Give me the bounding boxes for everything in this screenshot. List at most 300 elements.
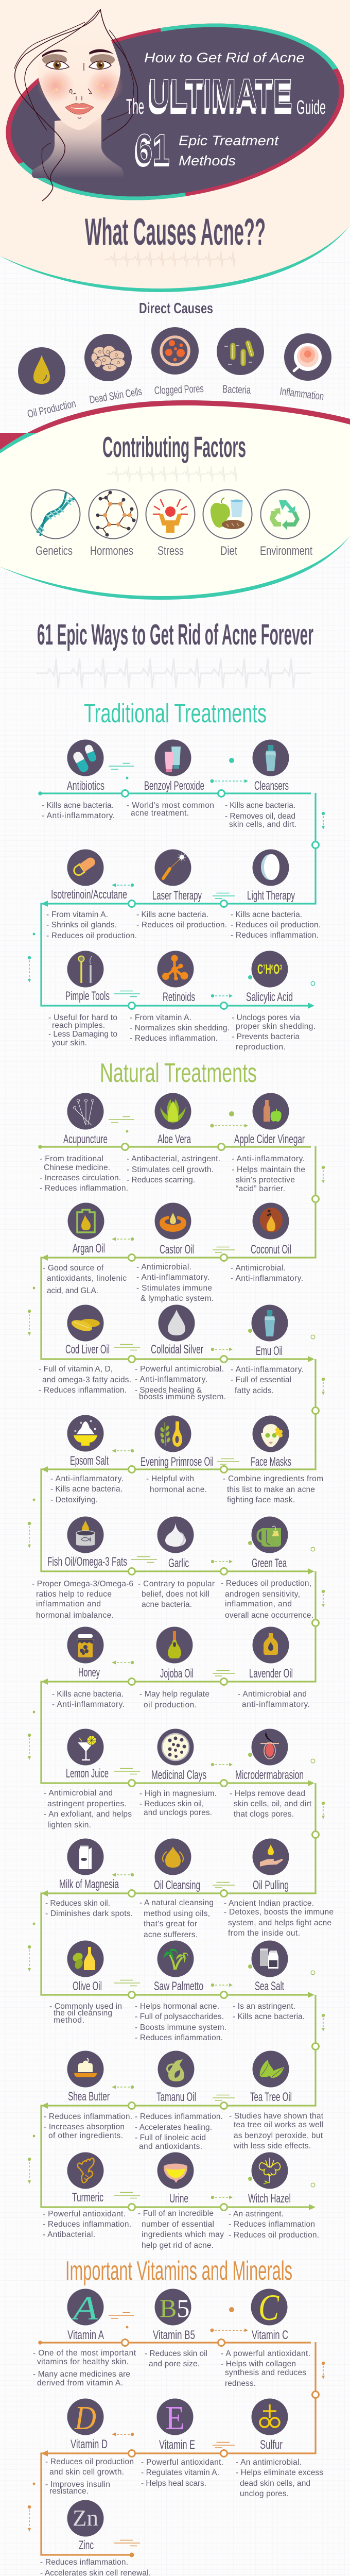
description: - Reduces inflammation. xyxy=(135,2033,223,2042)
item: Cleansers xyxy=(225,740,296,829)
icon: hand and drop xyxy=(252,1838,289,1875)
description: - Reduces oil production. xyxy=(231,921,321,929)
description: boosts immune system. xyxy=(139,1393,226,1401)
description xyxy=(52,1690,125,1709)
description: resistance. xyxy=(49,2487,89,2496)
label: Tea Tree Oil xyxy=(250,2090,292,2104)
description: method using oils, xyxy=(144,1909,210,1918)
description: skin's protective xyxy=(236,1176,295,1184)
item: Cod Liver Oil xyxy=(39,1304,131,1395)
description xyxy=(136,1263,214,1303)
description xyxy=(229,2210,319,2240)
item: Light Therapy xyxy=(231,849,321,940)
description: overall acne occurrence. xyxy=(225,1611,313,1620)
label: Light Therapy xyxy=(247,889,295,903)
label: Dead Skin Cells: Dead Skin Cells xyxy=(89,385,143,406)
description xyxy=(221,2349,310,2388)
description xyxy=(141,2458,223,2488)
label: Honey xyxy=(78,1666,100,1680)
item: Antibiotics xyxy=(42,740,115,820)
icon: hair follicle xyxy=(251,1729,288,1765)
description: - Removes oil, dead xyxy=(225,812,295,821)
item: Argan Oil xyxy=(43,1202,127,1295)
label: Apple Cider Vinegar xyxy=(234,1132,305,1146)
label: Castor Oil xyxy=(160,1243,194,1257)
description: - Boosts immune system. xyxy=(135,2023,226,2032)
icon: salt bowl xyxy=(67,1415,104,1452)
description xyxy=(127,801,214,818)
hero title xyxy=(126,50,326,176)
description xyxy=(136,910,227,929)
description xyxy=(230,1789,312,1819)
description: that's great for xyxy=(144,1920,197,1928)
description: this list to make an acne xyxy=(227,1485,315,1494)
description: of other ingredients. xyxy=(48,2131,123,2140)
item: Zinc xyxy=(40,2500,151,2576)
description: - World's most common xyxy=(127,801,214,810)
description: - Reduces oil production. xyxy=(229,2231,319,2240)
description xyxy=(45,1899,133,1918)
description: - Reduces inflammation. xyxy=(44,2112,132,2121)
description: - Helps remove dead xyxy=(230,1789,305,1798)
description: - From traditional xyxy=(40,1155,103,1163)
label: Sulfur xyxy=(260,2438,283,2452)
description: - Accelerates healing. xyxy=(135,2123,212,2132)
label: Sea Salt xyxy=(255,1979,284,1993)
icon: milk carton xyxy=(67,1838,104,1875)
description: dead skin cells, and xyxy=(240,2479,310,2488)
description: reach pimples. xyxy=(52,1021,105,1030)
decorative heartbeat line xyxy=(105,252,235,266)
word: ULTIMATE: ULTIMATE xyxy=(147,76,292,123)
description xyxy=(43,1264,127,1295)
subtitle line: How to Get Rid of Acne xyxy=(144,50,305,65)
label: Environment: Environment xyxy=(260,544,312,558)
description: - An astringent. xyxy=(229,2210,284,2218)
description xyxy=(139,1690,209,1709)
label: Vitamin B5 xyxy=(153,2328,195,2342)
label: Olive Oil xyxy=(73,1979,102,1993)
description: - Kills acne bacteria. xyxy=(225,801,295,810)
label: Turmeric xyxy=(72,2191,103,2205)
description: - Contrary to popular xyxy=(138,1580,215,1588)
description: - Stimulates cell growth. xyxy=(127,1165,214,1174)
icon: leaves xyxy=(252,2050,289,2088)
description: - From vitamin A. xyxy=(130,1013,191,1022)
icon: hormones xyxy=(89,489,138,539)
item: Evening Primrose Oil xyxy=(141,1416,214,1494)
description: Chinese medicine. xyxy=(44,1163,110,1172)
description: - Reduces inflammation. xyxy=(39,1386,127,1395)
description: hormonal acne. xyxy=(150,1485,207,1494)
description: - Normalizes skin shedding. xyxy=(130,1024,230,1032)
description xyxy=(135,2112,223,2151)
label: Oil Production: Oil Production xyxy=(26,398,77,420)
description: - Reduces scarring. xyxy=(127,1176,195,1184)
icon: oil bowl xyxy=(154,1202,191,1240)
label: Tamanu Oil xyxy=(156,2090,196,2104)
label: Bacteria: Bacteria xyxy=(222,383,251,396)
description: - Proper Omega-3/Omega-6 xyxy=(32,1580,133,1588)
label: Genetics: Genetics xyxy=(36,544,73,558)
item: Epsom Salt xyxy=(50,1415,124,1504)
label: Oil Pulling xyxy=(253,1878,289,1892)
description: - Reduces inflammation. xyxy=(40,2558,128,2567)
icon: capsules xyxy=(67,740,104,776)
description: astringent properties. xyxy=(47,1800,127,1808)
item: Lavender Oil xyxy=(238,1627,310,1709)
icon: clay dish xyxy=(157,1729,194,1765)
description: - Reduces skin oil xyxy=(145,2349,207,2358)
description: reproduction. xyxy=(236,1043,286,1052)
description: skin cells, oil, and dirt xyxy=(234,1800,312,1808)
icon: formula: 3 xyxy=(279,963,282,971)
icon: jojoba bottle xyxy=(156,1627,192,1663)
label: Medicinal Clays xyxy=(151,1768,206,1782)
description: fighting face mask. xyxy=(227,1496,295,1504)
description xyxy=(139,1899,214,1939)
description: system, and helps fight acne xyxy=(228,1919,331,1927)
label: Acupuncture xyxy=(63,1132,108,1146)
description xyxy=(139,1789,217,1817)
label: Benzoyl Peroxide xyxy=(144,779,204,793)
item: Face Masks xyxy=(223,1416,323,1504)
icon: garlic xyxy=(157,1517,194,1553)
description: your skin. xyxy=(52,1039,87,1047)
description: - Anti-inflammatory. xyxy=(50,1475,124,1483)
illustration: woman with acne xyxy=(14,9,138,201)
icon: light xyxy=(252,849,289,886)
description: - Reduces oil production xyxy=(45,2458,134,2466)
icon: letters B5: B5 xyxy=(160,2294,189,2323)
description: - Reduces inflammation. xyxy=(135,2112,223,2121)
description: - Powerful antimicrobial. xyxy=(135,1365,224,1374)
heading: Traditional Treatments: Traditional Treatments xyxy=(84,699,267,728)
description: - Increases circulation. xyxy=(40,1174,121,1182)
description xyxy=(40,1155,128,1193)
label: Lavender Oil xyxy=(249,1667,293,1681)
description xyxy=(43,2210,131,2239)
item: Lemon Juice xyxy=(44,1729,132,1829)
description xyxy=(236,2458,323,2498)
word: Guide: Guide xyxy=(296,97,326,118)
description: - Diminishes dark spots. xyxy=(45,1909,133,1918)
label: Milk of Magnesia xyxy=(59,1877,119,1891)
description: - Kills acne bacteria. xyxy=(233,2012,305,2021)
label: Vitamin D xyxy=(71,2437,108,2451)
description: - Regulates vitamin A. xyxy=(141,2468,219,2477)
description: - Studies have shown that xyxy=(229,2112,324,2121)
description: with less side effects. xyxy=(233,2142,311,2150)
tagline line 1: Epic Treatment xyxy=(179,133,279,148)
description xyxy=(223,1475,323,1504)
label: Oil Cleansing xyxy=(154,1878,200,1892)
description: - Unclogs pores via xyxy=(232,1013,300,1022)
icon: letter D: D xyxy=(74,2399,96,2437)
item: Urine xyxy=(138,2153,224,2250)
description: that clogs pores. xyxy=(234,1810,294,1819)
description: lighten skin. xyxy=(47,1821,91,1829)
description xyxy=(33,2349,136,2387)
description: - Detoxes, boosts the immune xyxy=(224,1908,334,1917)
icon: bacteria xyxy=(217,328,264,375)
description: oil production. xyxy=(144,1701,197,1709)
description xyxy=(130,1013,230,1043)
description xyxy=(50,1475,124,1504)
description: - Powerful antioxidant. xyxy=(43,2210,126,2218)
item: Vitamin D xyxy=(45,2399,134,2496)
label: Clogged Pores: Clogged Pores xyxy=(154,383,204,397)
description: and omega-3 fatty acids. xyxy=(42,1376,131,1384)
item: Benzoyl Peroxide xyxy=(127,740,214,818)
description: & lymphatic system. xyxy=(141,1294,214,1303)
icon: letter C: C xyxy=(258,2287,279,2328)
icon: dead skin cells xyxy=(84,334,132,381)
description: - Is an astringent. xyxy=(233,2002,295,2011)
description: - High in magnesium. xyxy=(139,1789,217,1798)
label: Shea Butter xyxy=(68,2090,110,2104)
icon: silver drop xyxy=(159,1304,195,1342)
description: help get rid of acne. xyxy=(142,2241,214,2250)
icon: oil production xyxy=(18,347,65,395)
label: Garlic xyxy=(168,1556,189,1570)
label: Lemon Juice xyxy=(66,1767,109,1781)
description: - Antimicrobial. xyxy=(231,1264,286,1273)
description: - From vitamin A. xyxy=(46,910,108,919)
icon: formula: O xyxy=(273,961,279,977)
description: - Helps hormonal acne. xyxy=(135,2002,219,2011)
description: and antioxidants. xyxy=(139,2142,202,2151)
description xyxy=(224,1899,334,1938)
description: hormonal imbalance. xyxy=(36,1611,114,1620)
label: Jojoba Oil xyxy=(160,1667,194,1681)
description: acne bacteria. xyxy=(142,1600,192,1609)
word: ULTIMATE xyxy=(147,71,292,123)
icon: letters Zn xyxy=(67,2500,104,2537)
description: - Anti-inflammatory. xyxy=(231,1274,303,1283)
description: derived from vitamin A. xyxy=(37,2379,123,2387)
description: - Reduces inflammation. xyxy=(43,2220,131,2229)
description: - Full of essential xyxy=(231,1376,291,1384)
label: Vitamin C xyxy=(252,2328,288,2342)
description: - Helps heal scars. xyxy=(141,2479,206,2488)
item: Emu Oil xyxy=(231,1304,304,1395)
description: - Anti-inflammatory. xyxy=(135,1375,207,1384)
description: - Anti-inflammatory. xyxy=(42,811,115,820)
item: Vitamin B5 xyxy=(145,2289,207,2368)
description xyxy=(138,2209,224,2250)
icon: letter D xyxy=(67,2399,104,2437)
word: ULTIMATE: ULTIMATE xyxy=(149,71,292,117)
label: Cleansers xyxy=(254,779,289,793)
description: - Kills acne bacteria. xyxy=(136,910,208,919)
label: Inflammation: Inflammation xyxy=(279,385,325,402)
label: Cod Liver Oil xyxy=(65,1343,110,1357)
description: - Full of vitamin A, D, xyxy=(39,1365,113,1374)
label: Colloidal Silver xyxy=(151,1343,203,1357)
description: - Reduces inflammation. xyxy=(40,1184,128,1193)
description: acne sufferers. xyxy=(144,1930,198,1939)
panel: hero cream blob xyxy=(0,0,350,292)
item: Retinoids xyxy=(130,951,230,1043)
description: - A powerful antioxidant. xyxy=(221,2349,310,2358)
icon: letter A: A xyxy=(71,2290,98,2327)
label: Witch Hazel xyxy=(248,2192,291,2206)
label: Vitamin E xyxy=(159,2438,195,2452)
timeline: traditional treatments xyxy=(28,758,325,1009)
label: Fish Oil/Omega-3 Fats xyxy=(47,1555,127,1569)
tagline line 2: Methods xyxy=(179,153,236,168)
description: - Increases absorption xyxy=(44,2123,125,2131)
item: Vitamin A xyxy=(33,2289,136,2387)
description: - Full of an incredible xyxy=(138,2209,214,2218)
description: vitamins for healthy skin. xyxy=(37,2358,129,2366)
icon: letter A xyxy=(67,2289,104,2327)
label: Epsom Salt xyxy=(70,1454,109,1468)
description: - Speeds healing & xyxy=(135,1386,202,1395)
description: - Reduces oil production. xyxy=(136,921,227,929)
item: Witch Hazel xyxy=(229,2153,319,2240)
label: Pimple Tools xyxy=(65,989,110,1003)
icon: molecule xyxy=(157,951,194,987)
label: Zinc xyxy=(79,2538,94,2552)
description: - Reduces skin oil. xyxy=(45,1899,110,1908)
description: - Antimicrobial. xyxy=(136,1263,191,1272)
item: Sea Salt xyxy=(233,1940,305,2021)
icon: bottle xyxy=(252,740,289,776)
description: - An exfoliant, and helps xyxy=(44,1810,132,1819)
description xyxy=(229,2112,324,2150)
icon: face mask xyxy=(252,1416,289,1452)
description: - Useful for hard to xyxy=(48,1013,117,1022)
hero title: The xyxy=(126,94,144,118)
description: - Full of polysaccharides. xyxy=(135,2012,224,2021)
icon: letter C xyxy=(251,2287,287,2328)
description xyxy=(48,1013,117,1047)
item: Acupuncture xyxy=(40,1093,128,1193)
icon: tools xyxy=(67,951,104,987)
panel: direct causes icons xyxy=(18,327,331,420)
icon: inflammation xyxy=(284,333,331,381)
description xyxy=(42,801,115,820)
description: and skin cell growth. xyxy=(49,2468,124,2477)
icon: capsule xyxy=(50,832,121,903)
icon: sulfur symbol xyxy=(251,2399,288,2435)
description: - Commonly used in xyxy=(49,2002,122,2011)
description: number of essential xyxy=(142,2220,214,2229)
item: Shea Butter xyxy=(44,2050,132,2140)
icon: formula: H xyxy=(266,961,271,977)
panel: contributing factors icons xyxy=(31,489,312,558)
description: - Many acne medicines are xyxy=(33,2370,130,2379)
description xyxy=(44,2112,132,2140)
description: inflammation and xyxy=(36,1600,101,1608)
description: - Kills acne bacteria. xyxy=(50,1485,122,1494)
label: Vitamin A xyxy=(67,2328,104,2342)
description: redness. xyxy=(225,2379,256,2388)
item: Castor Oil xyxy=(136,1202,214,1303)
icon: gold drop xyxy=(154,1838,191,1875)
label: Diet: Diet xyxy=(220,544,237,558)
item: Honey xyxy=(52,1627,125,1709)
description: - A natural cleansing xyxy=(139,1899,214,1907)
item: Colloidal Silver xyxy=(135,1304,226,1401)
icon: jug xyxy=(157,2050,195,2088)
number 61: 61 xyxy=(134,129,170,176)
description: - Good source of xyxy=(43,1264,104,1273)
number 61: 61 xyxy=(135,126,170,173)
description: acne treatment. xyxy=(131,809,189,818)
icon: oil bottle and sprig xyxy=(154,1416,191,1452)
item: Oil Pulling xyxy=(224,1838,334,1938)
item: Olive Oil xyxy=(49,1940,122,2025)
icon: honey jar xyxy=(67,1627,104,1663)
icon: laser pen xyxy=(154,849,191,886)
item: Coconut Oil xyxy=(231,1202,303,1283)
label: Isotretinoin/Accutane xyxy=(51,888,127,902)
icon: clogged pores xyxy=(151,327,199,375)
description: - Full of linoleic acid xyxy=(135,2133,206,2142)
label: Antibiotics xyxy=(67,779,104,793)
description: - Kills acne bacteria. xyxy=(231,910,302,919)
description: and unclogs pores. xyxy=(144,1808,212,1817)
icon: environment recycle xyxy=(260,489,310,539)
label: Evening Primrose Oil xyxy=(141,1455,214,1469)
description xyxy=(225,801,296,829)
icon: witch hazel flower xyxy=(251,2153,288,2189)
description xyxy=(135,1365,226,1401)
label: Hormones: Hormones xyxy=(90,544,133,558)
description: antioxidants, linolenic xyxy=(47,1274,127,1283)
description: inflammation, and xyxy=(225,1600,292,1608)
description: tea tree oil works as well xyxy=(234,2121,323,2129)
description: - Helps eliminate excess xyxy=(236,2468,323,2477)
label: Emu Oil xyxy=(256,1344,283,1358)
description: - Prevents bacteria xyxy=(232,1032,300,1041)
icon: letters Zn: Zn xyxy=(73,2505,98,2531)
description xyxy=(46,910,137,940)
icon: lemon martini xyxy=(67,1729,104,1765)
icon: formula: C xyxy=(257,961,267,977)
description: as benzoyl peroxide, but xyxy=(234,2131,323,2140)
item: Oil Cleansing xyxy=(139,1838,214,1939)
description xyxy=(146,1475,207,1494)
icon: diet xyxy=(203,489,252,539)
description: - Anti-inflammatory. xyxy=(232,1155,305,1163)
item: Isotretinoin/Accutane xyxy=(46,832,137,940)
label: Laser Therapy xyxy=(152,889,202,903)
description: - Antibacterial. xyxy=(43,2230,95,2239)
label: Retinoids xyxy=(163,990,195,1004)
description: - Improves insulin xyxy=(45,2480,110,2489)
icon: oil capsules xyxy=(67,1304,104,1342)
description xyxy=(44,1789,132,1829)
description: - Shrinks oil glands. xyxy=(46,921,117,929)
item: Vitamin C xyxy=(221,2287,310,2388)
description: - Antimicrobial and xyxy=(44,1789,113,1798)
description: proper skin shedding. xyxy=(236,1022,316,1031)
item: Vitamin E xyxy=(141,2399,223,2488)
icon: lavender bottle xyxy=(252,1627,289,1663)
label: Saw Palmetto xyxy=(154,1979,203,1993)
icon: aloe xyxy=(154,1093,191,1129)
panel: contributing factors blob xyxy=(0,400,350,600)
item: Pimple Tools xyxy=(48,951,117,1047)
icon: stress xyxy=(146,489,195,539)
icon: letters B5 xyxy=(154,2289,191,2326)
description: - May help regulate xyxy=(139,1690,209,1699)
description xyxy=(231,1365,304,1395)
